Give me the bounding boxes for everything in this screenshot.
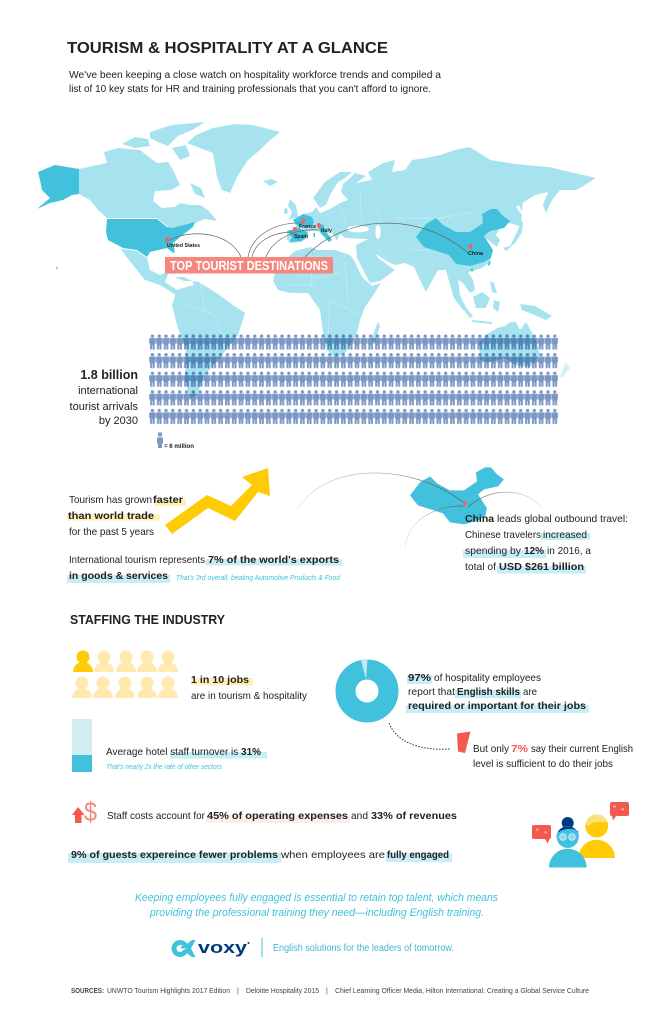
china map outbound (297, 467, 542, 547)
sources: Chief Learning Officer Media, Hilton International: Creating a Global Service Culture (335, 988, 589, 995)
highlighted person (73, 650, 93, 672)
pin: china (468, 244, 472, 250)
left speech bubble (532, 825, 551, 844)
heading: staffing the industry: STAFFING THE INDUSTRY (70, 613, 226, 627)
bar: staff turnover 31% (72, 719, 92, 772)
closing statement: providing the professional training they need—including English training. (149, 907, 484, 919)
text: china outbound: China (465, 513, 494, 525)
usa highlighted (106, 219, 195, 257)
text: china outbound: leads global outbound travel: (497, 513, 628, 525)
text: exports share: International tourism represents (69, 554, 205, 566)
pin: united states (165, 237, 169, 243)
icon group: 1 in 10 people (72, 650, 178, 698)
text: engaged employees: 9% of guests expereince fewer problems (71, 849, 278, 861)
right speech bubble: ” (621, 809, 624, 815)
pin: italy (317, 223, 321, 229)
pictogram legend (157, 432, 194, 450)
text: china outbound: 12% (524, 545, 545, 557)
wordmark: voxy (198, 938, 248, 957)
text: english skills: required or important for their jobs (408, 700, 586, 712)
logo: voxy (171, 938, 250, 957)
growth arrow (165, 468, 270, 534)
logo mark (171, 940, 196, 957)
text: staff turnover: Average hotel staff turnover is 31% (106, 746, 262, 758)
text: staff costs: Staff costs account for (107, 810, 205, 822)
text: english skills (406, 672, 589, 713)
text: 1 in 10 jobs: 1 in 10 jobs (191, 674, 249, 686)
label: china: China (468, 251, 484, 257)
right speech bubble (610, 802, 629, 820)
text: staff costs (107, 810, 457, 823)
text: engaged employees: fully engaged (387, 849, 449, 861)
text: staff costs: 45% of operating expenses (207, 810, 348, 822)
text: 7% english level: 7% (511, 743, 529, 755)
text: staff costs: 33% of revenues (371, 810, 457, 822)
pin: france (302, 218, 306, 224)
man (578, 814, 615, 858)
text: 7% english level: say their current English (531, 743, 633, 755)
stat: 1.8 billion arrivals (70, 368, 138, 427)
black sea and caspian (347, 225, 381, 239)
south america (172, 283, 245, 398)
closing statement (135, 892, 498, 919)
madagascar (371, 322, 380, 342)
text: china outbound: increased (543, 529, 587, 541)
text: tourism growth (67, 494, 186, 538)
text: exports share (67, 554, 342, 583)
banner: top tourist destinations: TOP TOURIST DESTINATIONS (170, 258, 328, 273)
sources: SOURCES: (71, 988, 104, 995)
pin (463, 501, 467, 507)
text: china outbound: in 2016, a (547, 545, 591, 557)
label: spain: Spain (294, 234, 309, 240)
logo divider (262, 938, 263, 957)
australia (479, 322, 540, 367)
left speech bubble: “ (536, 829, 539, 835)
hawaii (56, 266, 58, 270)
text: exports share: 7% of the world's exports (208, 554, 339, 566)
text: staff turnover: That's nearly 2x the rate of other sectors (106, 764, 222, 771)
text: staff turnover (106, 746, 267, 771)
text: china outbound: Chinese travelers (465, 529, 541, 541)
text: china outbound: spending by (465, 545, 522, 557)
world map (37, 122, 596, 398)
stat: 1.8 billion arrivals: by 2030 (99, 415, 138, 427)
text: china outbound: total of (465, 561, 496, 573)
remaining nine people (72, 650, 178, 698)
red wedge: 7% (457, 732, 470, 753)
text: english skills: are (523, 686, 537, 698)
stat: 1.8 billion arrivals: international (78, 385, 138, 397)
text: staff costs: and (351, 810, 368, 822)
text: tourism growth: Tourism has grown (69, 494, 152, 506)
text: exports share: That's 3rd overall, beating Automotive Products & Food (176, 575, 341, 582)
donut chart: 97% (346, 660, 388, 712)
text: tourism growth: than world trade (68, 510, 154, 522)
alaska highlighted (37, 165, 79, 209)
text: tourism growth: for the past 5 years (69, 526, 154, 538)
british isles (284, 199, 298, 220)
text: exports share: in goods & services (69, 570, 168, 582)
sources: UNWTO Tourism Highlights 2017 Edition (107, 988, 230, 995)
destination arcs (168, 223, 468, 257)
right speech bubble: “ (613, 806, 616, 812)
dotted connector (389, 723, 450, 749)
asia pacific islands (458, 195, 570, 378)
closing statement: Keeping employees fully engaged is essential to retain top talent, which means (135, 892, 498, 904)
greenland (187, 124, 280, 193)
france highlighted (293, 214, 314, 227)
stat: 1.8 billion arrivals: tourist arrivals (70, 401, 138, 413)
population pictogram: 300 people (149, 334, 558, 424)
sources (71, 988, 589, 995)
sources: | (237, 988, 239, 995)
eurasia (287, 147, 596, 310)
scandinavia (313, 172, 352, 208)
destination pins and labels (165, 218, 484, 257)
text: english skills: report that (408, 686, 455, 698)
intro text: We've been keeping a close watch on hospitality workforce trends and compiled a (69, 69, 441, 81)
north america landmass (79, 122, 217, 295)
italy highlighted (318, 224, 332, 242)
text: 7% english level (473, 743, 633, 770)
sources: | (326, 988, 328, 995)
large china shape (410, 467, 504, 524)
trademark dot (248, 942, 250, 944)
africa (273, 247, 381, 358)
sources: Deloitte Hospitality 2015 (246, 988, 319, 995)
text: tourism growth: faster (153, 494, 183, 506)
intro text (69, 69, 441, 95)
text: engaged employees (68, 849, 452, 863)
label: italy: Italy (321, 228, 333, 234)
text: english skills: 97% (408, 672, 432, 684)
sardinia highlighted (314, 233, 315, 237)
tagline: English solutions for the leaders of tomorrow. (273, 942, 454, 954)
pictogram legend: = 6 million (164, 444, 194, 450)
text: english skills: English skills (457, 686, 520, 698)
woman (549, 817, 587, 868)
icon: two people talking (532, 802, 629, 868)
outbound arcs (297, 473, 463, 510)
taiwan and hainan (471, 261, 491, 271)
china highlighted (416, 209, 510, 266)
text: engaged employees: when employees are (280, 849, 385, 861)
spain highlighted (287, 228, 308, 242)
text: english skills: of hospitality employees (434, 672, 541, 684)
title: TOURISM & HOSPITALITY AT A GLANCE (67, 40, 388, 57)
pin: spain (293, 227, 297, 233)
country borders (186, 190, 475, 372)
iceland (263, 179, 278, 186)
text: 7% english level: level is sufficient to do their jobs (473, 758, 613, 770)
left speech bubble: ” (544, 832, 547, 838)
intro text: list of 10 key stats for HR and training professionals that you can't afford to ignore. (69, 83, 431, 95)
label: france: France (299, 224, 316, 230)
text: 1 in 10 jobs (191, 674, 308, 702)
text: 1 in 10 jobs: are in tourism & hospitality (191, 690, 308, 702)
label: united states: United States (167, 243, 200, 249)
text: china outbound (463, 513, 628, 574)
stat: 1.8 billion arrivals: 1.8 billion (80, 368, 138, 382)
text: 7% english level: But only (473, 743, 510, 755)
text: china outbound: USD $261 billion (499, 561, 584, 573)
icon: rising costs (72, 797, 97, 827)
icon: rising costs: $ (84, 797, 97, 827)
